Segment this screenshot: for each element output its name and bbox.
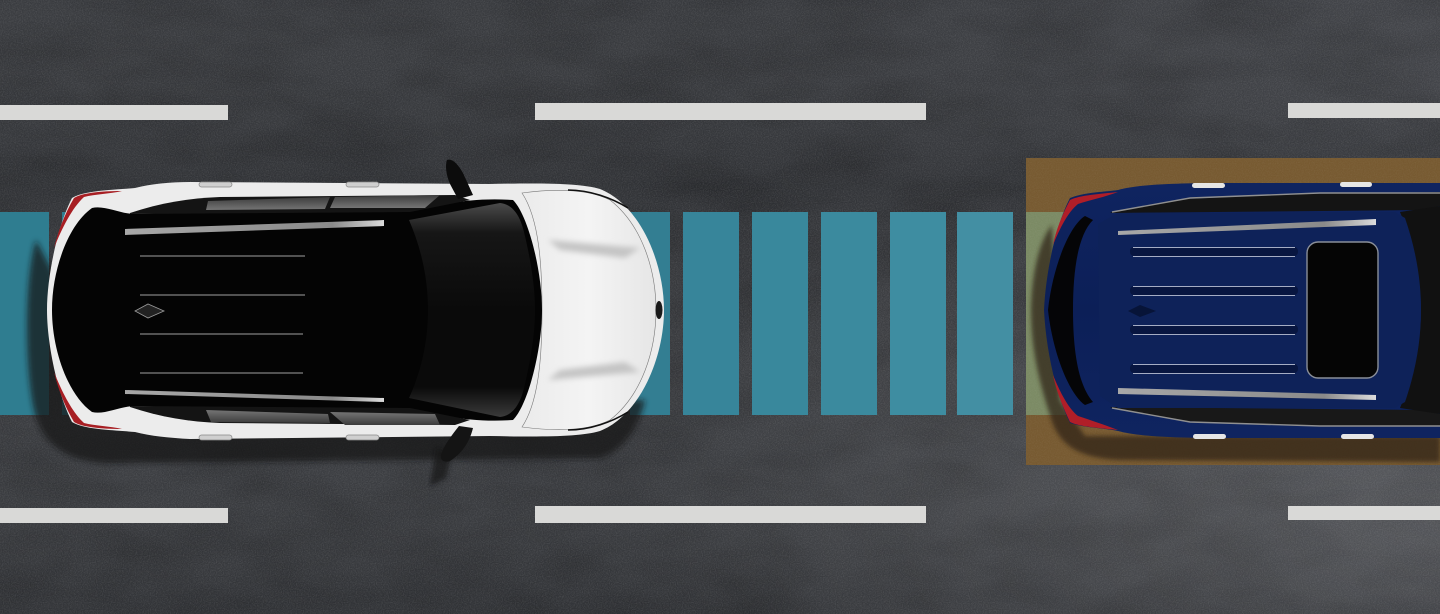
roof emblem bbox=[135, 304, 164, 318]
roof rail top bbox=[125, 220, 384, 235]
door handles bbox=[199, 182, 379, 440]
roof channels bbox=[1130, 247, 1298, 374]
shadow of blue car bbox=[1031, 225, 1440, 462]
door handles bbox=[1192, 182, 1374, 439]
top side windows bbox=[130, 195, 470, 214]
blue car bbox=[1044, 182, 1440, 439]
roof emblem bbox=[1128, 305, 1156, 317]
roof panel bbox=[1098, 212, 1421, 408]
detection zone around front vehicle bbox=[1026, 158, 1440, 465]
tail light bottom bbox=[1053, 375, 1118, 430]
sunroof bbox=[1307, 242, 1378, 378]
white car body bbox=[47, 182, 664, 439]
side chrome top bbox=[1112, 193, 1440, 212]
roof rail top bbox=[1118, 219, 1376, 235]
roof rail bottom bbox=[125, 390, 384, 402]
blue car body bbox=[1044, 183, 1440, 438]
hood creases bbox=[548, 240, 640, 380]
rear window bbox=[1048, 216, 1093, 405]
kia logo bbox=[656, 301, 662, 319]
side chrome bottom bbox=[1112, 408, 1440, 426]
white car hood bbox=[522, 190, 656, 430]
tail light top bbox=[1053, 192, 1118, 245]
roof grooves bbox=[140, 256, 305, 373]
top lane markings bbox=[0, 103, 1440, 120]
white car bbox=[47, 160, 664, 462]
side mirror top bbox=[446, 160, 473, 199]
bottom side windows bbox=[130, 406, 470, 425]
windshield bbox=[409, 203, 535, 417]
side glass bottom bbox=[1110, 407, 1440, 426]
black roof and glasshouse bbox=[52, 199, 542, 421]
side glass top bbox=[1110, 192, 1440, 213]
rear tail light top bbox=[54, 191, 122, 248]
roof rail bottom bbox=[1118, 388, 1376, 400]
shadow of white car bbox=[27, 240, 645, 463]
side mirror bottom bbox=[441, 426, 473, 462]
mirror shadow of white car bbox=[430, 448, 452, 486]
radar sensing bars bbox=[0, 212, 1013, 415]
bottom lane markings bbox=[0, 506, 1440, 523]
rear tail light bottom bbox=[54, 372, 122, 429]
windshield and front bbox=[1400, 206, 1440, 414]
front fender dark trims bbox=[568, 190, 628, 430]
